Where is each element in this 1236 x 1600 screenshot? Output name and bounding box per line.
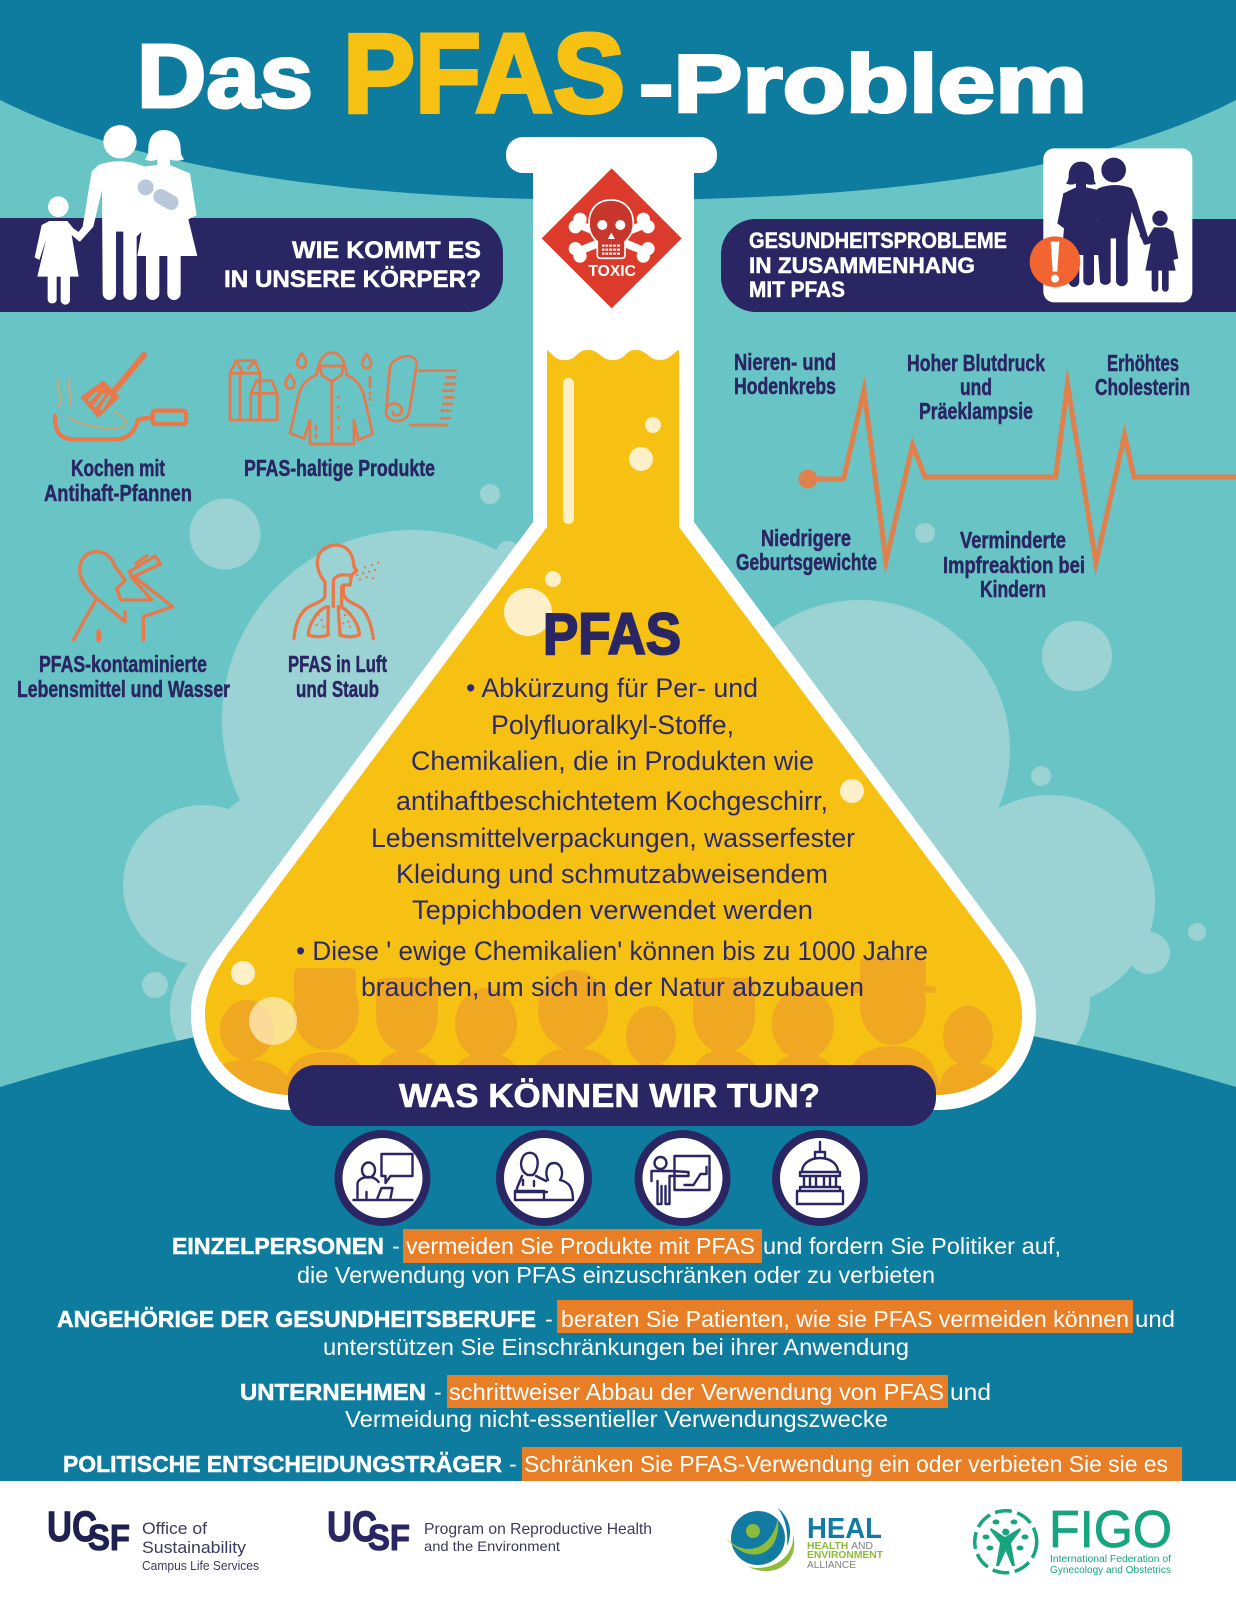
action: businesses: UNTERNEHMEN bbox=[240, 1379, 426, 1405]
label: kidney and testicular cancer: Hodenkrebs bbox=[734, 373, 836, 399]
banner heading: health problems: MIT PFAS bbox=[749, 277, 845, 302]
text block: PFAS definition: • Diese ' ewige Chemikalien' können bis zu 1000 Jahre bbox=[296, 936, 928, 966]
action: health professionals: - bbox=[545, 1306, 553, 1332]
action: health professionals: und bbox=[1135, 1306, 1175, 1332]
banner: what can we do: WAS KÖNNEN WIR TUN? bbox=[399, 1077, 820, 1114]
icon: airway and lungs bbox=[294, 545, 379, 638]
left banner bbox=[0, 218, 503, 312]
logo: UCSF PRHE: and the Environment bbox=[424, 1538, 560, 1554]
logo: FIGO bbox=[975, 1501, 1172, 1576]
label: cooking with non-stick pans bbox=[44, 455, 192, 506]
icon: toxic diamond bbox=[542, 168, 682, 308]
banner heading: how it enters the body: IN UNSERE KÖRPER? bbox=[224, 266, 481, 293]
baby bbox=[138, 179, 181, 213]
flask highlights and bubbles bbox=[231, 378, 864, 1045]
text block: PFAS definition: Teppichboden verwendet werden bbox=[412, 895, 813, 925]
icon: individuals bbox=[338, 1134, 426, 1222]
label: cholesterol bbox=[1095, 350, 1190, 400]
text block: PFAS definition: Kleidung und schmutzabweisendem bbox=[396, 859, 828, 889]
label: high blood pressure: Präeklampsie bbox=[919, 398, 1033, 424]
action: businesses: Vermeidung nicht-essentieller Verwendungszwecke bbox=[345, 1406, 888, 1432]
logo: UCSF Office of Sustainability: Campus Life Services bbox=[142, 1559, 259, 1573]
label: reduced vaccine response: Verminderte bbox=[960, 527, 1066, 553]
people silhouettes in liquid bbox=[205, 958, 1005, 1095]
action: businesses: - bbox=[434, 1379, 442, 1405]
logo: UCSF PRHE: SF bbox=[368, 1517, 410, 1558]
logo: FIGO: Gynecology and Obstetrics bbox=[1050, 1564, 1171, 1576]
banner heading: how it enters the body: WIE KOMMT ES bbox=[292, 237, 481, 264]
label: air and dust: PFAS in Luft bbox=[288, 651, 387, 677]
text block: PFAS definition bbox=[296, 673, 928, 1002]
text block: PFAS definition: antihaftbeschichtetem Kochgeschirr, bbox=[396, 786, 828, 816]
label: contaminated food and water: Lebensmittel und Wasser bbox=[17, 676, 230, 702]
logo: UCSF PRHE bbox=[327, 1503, 652, 1558]
label: low birth weight bbox=[736, 525, 877, 575]
text block: PFAS definition: brauchen, um sich in der Natur abzubauen bbox=[361, 972, 864, 1002]
icon: person drinking bbox=[73, 552, 173, 640]
label: PFAS products: PFAS-haltige Produkte bbox=[244, 455, 435, 481]
label: low birth weight: Niedrigere bbox=[761, 525, 851, 551]
action: businesses: und bbox=[950, 1379, 991, 1405]
action: individuals: EINZELPERSONEN bbox=[172, 1233, 384, 1259]
icon: health professionals bbox=[500, 1134, 588, 1222]
logo: HEAL: ALLIANCE bbox=[807, 1559, 856, 1571]
icon: businesses presentation bbox=[638, 1134, 726, 1222]
flask bbox=[191, 137, 1036, 1110]
label: contaminated food and water: PFAS-kontaminierte bbox=[39, 651, 207, 677]
text block: PFAS definition: Polyfluoralkyl-Stoffe, bbox=[491, 710, 734, 740]
title: Das bbox=[137, 27, 313, 127]
label: contaminated food and water bbox=[17, 651, 230, 702]
text block: PFAS definition: Chemikalien, die in Produkten wie bbox=[411, 746, 814, 776]
label: high blood pressure: Hoher Blutdruck bbox=[907, 350, 1045, 376]
label: low birth weight: Geburtsgewichte bbox=[736, 549, 877, 575]
logo: UCSF Office of Sustainability: SF bbox=[88, 1517, 130, 1558]
logo: FIGO: International Federation of bbox=[1050, 1553, 1171, 1565]
logo: UCSF PRHE: Program on Reproductive Health bbox=[424, 1521, 652, 1538]
logo: HEAL: HEAL bbox=[807, 1513, 882, 1545]
logo: UCSF Office of Sustainability: Office of bbox=[142, 1519, 207, 1538]
banner: what can we do bbox=[288, 1065, 936, 1126]
label: kidney and testicular cancer: Nieren- und bbox=[734, 349, 836, 375]
banner heading: how it enters the body bbox=[224, 237, 481, 293]
logo: FIGO: FIGO bbox=[1049, 1501, 1172, 1559]
action: individuals bbox=[172, 1229, 1061, 1288]
label: reduced vaccine response: Impfreaktion bei bbox=[943, 552, 1085, 578]
logo: UCSF Office of Sustainability: Sustainability bbox=[142, 1538, 247, 1557]
action: businesses bbox=[240, 1375, 991, 1432]
action: policy makers bbox=[63, 1447, 1182, 1482]
label: cholesterol: Erhöhtes bbox=[1107, 350, 1179, 376]
label: air and dust bbox=[288, 651, 387, 702]
banner heading: health problems: IN ZUSAMMENHANG bbox=[749, 253, 975, 278]
label: high blood pressure: und bbox=[960, 374, 992, 400]
logo: HEAL: ENVIRONMENT bbox=[807, 1549, 884, 1561]
label: reduced vaccine response bbox=[943, 527, 1085, 602]
icon: family silhouette white bbox=[35, 125, 197, 305]
action: health professionals: ANGEHÖRIGE DER GESUNDHEITSBERUFE bbox=[57, 1306, 536, 1332]
logo: UCSF PRHE: UC bbox=[327, 1503, 377, 1551]
banner heading: health problems bbox=[749, 228, 1007, 302]
ECG line chart bbox=[798, 384, 1236, 563]
action: individuals: vermeiden Sie Produkte mit PFAS bbox=[406, 1233, 755, 1259]
label: kidney and testicular cancer bbox=[734, 349, 836, 399]
label: cholesterol: Cholesterin bbox=[1095, 374, 1190, 400]
icon: government capitol bbox=[776, 1134, 864, 1222]
logo: HEAL bbox=[726, 1508, 884, 1571]
action: policy makers: - bbox=[509, 1451, 517, 1477]
banner heading: health problems: GESUNDHEITSPROBLEME bbox=[749, 228, 1007, 253]
label: high blood pressure bbox=[907, 350, 1045, 424]
icon: non-stick pan bbox=[55, 355, 186, 439]
label: cooking with non-stick pans: Kochen mit bbox=[71, 455, 165, 481]
action: health professionals bbox=[57, 1300, 1175, 1360]
heading: PFAS definition: PFAS bbox=[543, 602, 681, 667]
text block: PFAS definition: Lebensmittelverpackungen, wasserfester bbox=[371, 823, 855, 853]
action: policy makers: Schränken Sie PFAS-Verwendung ein oder verbieten Sie sie es bbox=[524, 1451, 1168, 1477]
title bbox=[137, 11, 1087, 136]
icon: toxic diamond: TOXIC bbox=[588, 263, 636, 280]
icon: PFAS products bbox=[230, 353, 456, 444]
label: reduced vaccine response: Kindern bbox=[980, 576, 1046, 602]
action: businesses: schrittweiser Abbau der Verwendung von PFAS bbox=[449, 1379, 944, 1405]
footer bbox=[0, 1481, 1236, 1600]
action: health professionals: unterstützen Sie Einschränkungen bei ihrer Anwendung bbox=[323, 1334, 909, 1360]
action: health professionals: beraten Sie Patienten, wie sie PFAS vermeiden können bbox=[561, 1306, 1129, 1332]
title: -Problem bbox=[639, 39, 1087, 130]
action: individuals: und fordern Sie Politiker auf, bbox=[763, 1233, 1061, 1259]
text block: PFAS definition: • Abkürzung für Per- und bbox=[466, 673, 758, 703]
label: air and dust: und Staub bbox=[296, 676, 379, 702]
logo: UCSF Office of Sustainability bbox=[47, 1503, 259, 1573]
icon: family card with warning bbox=[1030, 148, 1192, 302]
action: individuals: die Verwendung von PFAS einzuschränken oder zu verbieten bbox=[297, 1262, 935, 1288]
label: cooking with non-stick pans: Antihaft-Pfannen bbox=[44, 480, 192, 506]
right banner bbox=[721, 219, 1236, 312]
action: individuals: - bbox=[392, 1233, 400, 1259]
action: policy makers: POLITISCHE ENTSCHEIDUNGSTRÄGER bbox=[63, 1451, 502, 1477]
title: PFAS bbox=[343, 11, 625, 136]
logo: HEAL: HEALTH AND bbox=[807, 1540, 873, 1552]
logo: UCSF Office of Sustainability: UC bbox=[47, 1503, 97, 1551]
